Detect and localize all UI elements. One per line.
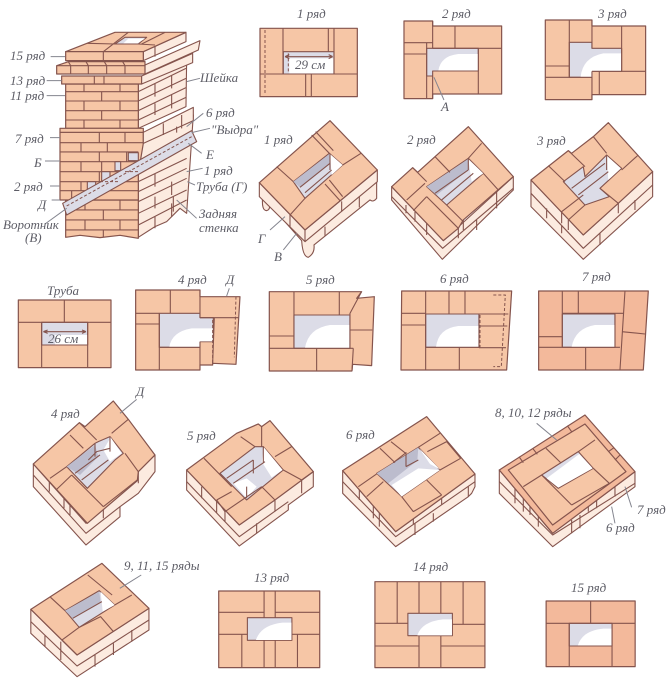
plan: row 15 xyxy=(546,601,635,667)
diagonal otter band xyxy=(63,131,197,215)
middle row left labels: 5 ряд xyxy=(187,428,216,443)
isometric: rows 8, 10, 12 xyxy=(499,415,635,547)
chimney labels: Труба (Г) xyxy=(196,179,247,194)
bottom row plans and isometric xyxy=(31,563,635,677)
top row labels: Г xyxy=(257,231,266,246)
chimney labels: "Выдра" xyxy=(211,122,259,137)
middle row right labels: 6 ряд xyxy=(440,271,469,286)
leader to Д xyxy=(120,399,137,413)
middle row left labels: 5 ряд xyxy=(306,272,335,287)
bottom row labels: 14 ряд xyxy=(413,559,449,574)
chimney labels: 2 ряд xyxy=(14,179,43,194)
top row plans and isometrics xyxy=(259,20,653,259)
bottom row labels: 9, 11, 15 ряды xyxy=(124,558,200,573)
top row labels: 1 ряд xyxy=(297,6,326,21)
plan: row 13 xyxy=(219,591,320,668)
chimney labels: Задняя xyxy=(199,206,237,221)
top row labels: В xyxy=(274,249,282,264)
middle row right labels: 7 ряд xyxy=(637,502,666,517)
chimney labels: Д xyxy=(36,197,47,212)
middle row right labels: 7 ряд xyxy=(582,269,611,284)
isometric: row 3 xyxy=(531,123,653,259)
plan: row 2 xyxy=(404,21,502,100)
top row labels: 2 ряд xyxy=(442,6,471,21)
top row labels: А xyxy=(440,99,449,114)
top row labels: 29 см xyxy=(295,57,325,72)
middle row right labels: 6 ряд xyxy=(346,427,375,442)
plan: row 4 xyxy=(136,288,240,370)
isometric: row 6 xyxy=(343,417,475,547)
bottom row labels: 13 ряд xyxy=(254,570,290,585)
plan: pipe xyxy=(18,300,111,368)
plan: row 14 xyxy=(375,582,485,668)
chimney labels: Воротник xyxy=(3,217,60,232)
chimney labels: Е xyxy=(205,147,214,162)
bottom row labels: 15 ряд xyxy=(571,580,607,595)
bottom row labels xyxy=(124,558,607,595)
plan: row 1 xyxy=(260,28,357,97)
plan: row 5 xyxy=(269,292,374,371)
isometric: row 5 xyxy=(187,421,313,546)
isometric: row 2 xyxy=(392,127,513,259)
isometric: rows 9, 11, 15 xyxy=(31,563,149,677)
isometric: row 4 xyxy=(33,401,155,545)
middle row left plans and isometrics xyxy=(18,288,374,546)
middle row left labels xyxy=(47,272,335,443)
top row labels: 3 ряд xyxy=(597,6,627,21)
chimney labels: 15 ряд xyxy=(10,48,46,63)
chimney labels: 6 ряд xyxy=(206,105,235,120)
top row labels: 1 ряд xyxy=(264,132,293,147)
chimney cutaway illustration xyxy=(45,32,210,238)
chimney labels: 13 ряд xyxy=(10,73,46,88)
chimney labels: (В) xyxy=(25,230,42,245)
middle row right plans and isometrics xyxy=(343,291,648,547)
top row labels: 3 ряд xyxy=(536,133,566,148)
plan: row 7 xyxy=(539,291,648,370)
chimney labels: стенка xyxy=(199,220,239,235)
middle row left labels: Труба xyxy=(47,283,80,298)
isometric: row 1 xyxy=(259,121,377,257)
middle row left labels: Д xyxy=(134,384,145,399)
plan: row 6 xyxy=(401,291,512,370)
top row labels: 2 ряд xyxy=(407,132,436,147)
chimney labels: 1 ряд xyxy=(204,163,233,178)
middle row right labels xyxy=(346,269,666,535)
chimney labels: Б xyxy=(33,155,42,170)
middle row right labels: 6 ряд xyxy=(606,520,635,535)
chimney labels: Шейка xyxy=(199,70,239,85)
plan: row 3 xyxy=(545,20,646,100)
middle row left labels: 4 ряд xyxy=(51,406,80,421)
middle row right labels: 8, 10, 12 ряды xyxy=(495,405,572,420)
chimney labels: 11 ряд xyxy=(10,88,45,103)
middle row left labels: 4 ряд xyxy=(178,272,207,287)
top row labels xyxy=(257,6,627,264)
chimney labels: 7 ряд xyxy=(15,131,44,146)
chimney labels xyxy=(3,48,259,245)
middle row left labels: Д xyxy=(224,272,235,287)
middle row left labels: 26 см xyxy=(48,331,78,346)
